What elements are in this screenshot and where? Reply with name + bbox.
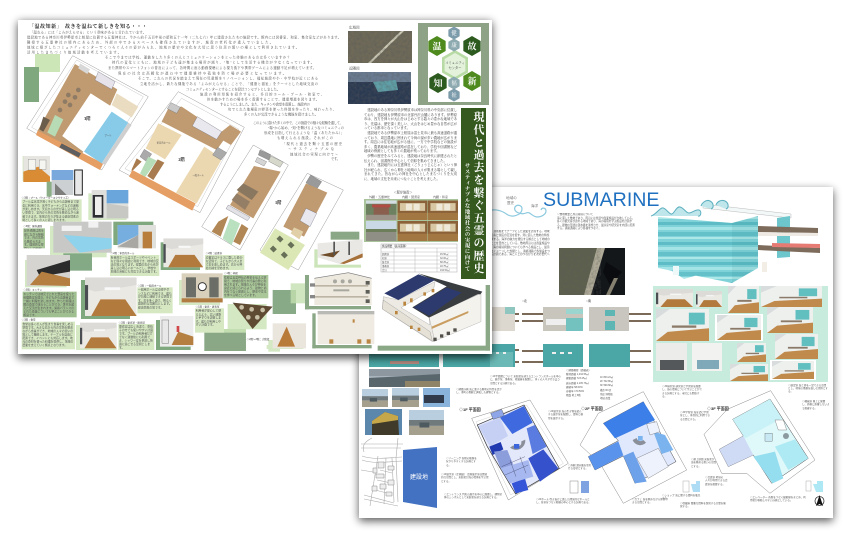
text blocks: plan notes: 3F 599.68㎡: [600, 384, 613, 387]
text block: introduction: するようにしました。また、キッチンや食堂を設置し、施設内の: [220, 102, 310, 106]
photos: existing facility: ＜既存施設＞: [393, 190, 413, 194]
heading: 温故知新: 「温故知新」 故きを温ねて新しきを知る・・・: [29, 23, 147, 30]
text blocks: plan notes: 地域 商業: [600, 397, 610, 400]
text blocks: plan notes: ◇機械室 屋上に配置し、外観に影響しないよう配慮する。: [802, 400, 829, 410]
text blocks: plan notes: ◇会議室 地域の人々が利用できる会議室を配置する。: [705, 476, 727, 486]
text: callout 6: [137, 284, 173, 313]
table: facility spec: 施設概要（延床面積）: [382, 244, 408, 248]
text blocks: plan notes: ◇ショップ 海に関する資料を販売する。: [662, 494, 700, 500]
text blocks: plan notes: ◇屋上庭園 来館者が海を眺める憩いの空間とする。: [691, 458, 716, 468]
hexagon: 知: 知: [433, 78, 443, 88]
text: callout 3: 多目的ホールはスポーツやイベントなど様々な用途に利用でき、地域の交流の場となります。壁面の窓から光が差し込む明るいホールとし、学校や地域の活動にも対応できる計画です。: [111, 256, 159, 273]
table: facility spec: [381, 244, 457, 272]
text block: site description: [364, 108, 457, 188]
text blocks: plan notes: ◇収蔵庫 貴重な資料を保管する空間を確保する。: [680, 502, 726, 508]
text: callout 8: 拝殿は五霊神社の歴史を伝える空間で、地域の祭りや行事の際に利用されます。地域の人々が神社を身近に感じられるよう、建物と境内をつなぐ配置とし、歴史や文化を学べる場としています。: [224, 276, 266, 296]
text blocks: plan notes: ◇建築計画 海に面する敷地の特性を活かし、港町の景観と調和した建物とする。: [456, 388, 502, 394]
render: open terrace: [314, 232, 363, 268]
text blocks: plan notes: 容積率 170.56%: [566, 390, 584, 393]
text: callout 3: [110, 251, 159, 276]
hexagons: 健康: 康: [451, 41, 457, 49]
decoration: blue wave with labels: 海洋: [531, 203, 539, 208]
render: upper-left wall (top): [47, 170, 82, 197]
text block: introduction: 隣接する五霊神社の境内にあるため、外部の中でさるスペースも確保されていますが、施設の老朽化が進んでいました。: [27, 40, 273, 44]
block: green decoration: [273, 283, 308, 314]
text: callout 5: 食堂は多くの人が集まり食事を楽しめる空間です。大きな窓から外の景色を眺めながら食事ができ、地域の人々の憩いの場として機能します。テーブルを自由に配置でき、イベントにも対応します。地元の食材を使った料理を提供し、地域の農業を支えていく拠点となります。: [22, 322, 73, 347]
text block: introduction: ～サスティナブルな: [288, 146, 334, 151]
text block: introduction: 形成を目指して行えるような「温（あたたかみ）」: [264, 130, 344, 135]
text blocks: plan notes: 用途 博物館: [600, 393, 613, 396]
decoration: green blocks: [24, 54, 60, 102]
floor plan: 2F: [119, 92, 244, 213]
labels: elevations: ○南: [586, 298, 591, 303]
render: tables from above: [233, 303, 273, 329]
poster: SUBMARINE (back sheet): [359, 187, 833, 521]
photo: 広域図: [348, 24, 412, 63]
map: site plan with 建設地: [361, 438, 437, 508]
hexagons: 福祉: 祉: [451, 91, 457, 99]
text: callout 10: [195, 305, 224, 333]
text blocks: plan notes: ◇外観 潜水艦を思わせる形状とする。: [568, 464, 591, 470]
text block: introduction: また携帯やスマートフォンの普及によって、各時間に座る動画視聴による視力低下や携帯ゲームによる運動不足が増えています。: [108, 65, 316, 70]
text blocks: plan notes: ◇2Fホール 吹き抜けに面した開放的なホールとし、各室をつなぐ動線の中心とする計画である。: [536, 498, 591, 504]
text block: concept notes: 海に面した敷地であり、周辺には漁港や商業施設が立地している。多くの観光客が訪れる地域であり、海の環境を学ぶ施設を計画する。建物の形状は潜水艦を連想させ、展示室や研究室を内部に配置する。連絡通路により各棟をつなぐ。: [557, 217, 635, 230]
hexagon: 故: 故: [467, 40, 477, 52]
text block: introduction: 地域に根ざしたコミュニティセンターでくつろぐ人々の姿がみられ、地域の歴史や文化を大切に思う住民の憩いの場として利用されています。: [27, 44, 299, 50]
text blocks: plan notes: [441, 369, 830, 510]
hexagon: 新: 新: [467, 76, 477, 86]
text block: introduction: 地域社会の実現に向けて～: [290, 152, 339, 156]
text block: introduction: "場"から始め、"知"を繋げるようなコミュニティの: [268, 125, 344, 130]
text: callout 1: プールは水深が浅く子どもから高齢者まで安全に利用でき、水中ウォーキングなどの運動が楽しめます。天窓からの光が差し込む明るい空間で、室内から外の景色を眺めながら運動できます。地域の方々が集まる健康増進の場として多くの人に親しまれます。: [22, 200, 79, 222]
text: callout 5: ◇3階：食堂: [22, 318, 36, 322]
text blocks: plan notes: ◇カフェ 海を眺めながら休憩できる空間とする。: [632, 498, 668, 504]
text block: site description: 伊勢の歴史をみてみると、建設地は奈良時代に創建されたと伝えられ、図書館を中心として信仰を集めてきました。: [364, 154, 457, 163]
hexagon: center: センター: [448, 65, 462, 70]
render: corner room with orange floor: [23, 156, 50, 182]
table: facility spec: 和室: [382, 256, 387, 260]
text: callout 9: 更衣室は広く清潔で、車椅子の方でも使いやすい計画です。プールの利用者だけでなく運動後にも利用でき、シャワー室を併設し快適に過ごせる空間とします。: [119, 325, 153, 349]
text: callout 4: キッチンでは地元でとれた野菜を使った料理教室を開き、子どもから高齢者まで一緒に料理を楽しめます。作った料理は隣の食堂で味わうことができ、世代を超えた交流が生まれます。栄養バランスのとれた食事についても学ぶことができる施設です。: [23, 292, 74, 317]
photo: 近隣図: 近隣図: [349, 66, 360, 70]
text: callout 2: ◇3階：屋外通路: [23, 224, 43, 228]
table: facility spec: 集会室: [382, 260, 390, 264]
3D model: building with solar roof: [378, 273, 490, 351]
text: callout 7: ◇2階：読書室: [206, 251, 222, 255]
text: callout 7: 読書室はテラスに面した静かな空間で、子どもから大人まで本を楽しめます。窓から神社の緑を望めます。: [206, 256, 242, 269]
photos: existing facility: [364, 190, 458, 242]
floor plan: 3F: 3階: [84, 115, 91, 122]
renders and elevations: lower middle: [267, 232, 374, 349]
hexagon: 温: 温: [432, 40, 442, 52]
text blocks: plan notes: ◇2F展示室 海の生き物を紹介する展示室を配置し、資料と模型を展示する。: [548, 410, 583, 420]
photos: existing facility: 内観：図書室: [402, 194, 420, 199]
table: facility spec: 164.50㎡: [440, 268, 450, 272]
decoration: blue wave with labels: 地域の: [506, 195, 517, 200]
text block: introduction: 活用したまちづくり地域活動を考えています。: [27, 50, 121, 54]
heading: 2F plan: ◇2F 平面図: [581, 406, 603, 411]
text: label 大階段: ◇2階〜3階：大階段: [247, 337, 270, 341]
text: callout 9: ◇2階：更衣室・脱衣場: [119, 320, 145, 324]
text: callout 7: [205, 251, 244, 270]
text blocks: plan notes: 1F 803.24㎡: [600, 376, 613, 379]
render: corridor with sky: [92, 190, 128, 218]
table: facility spec: 合計: [382, 268, 387, 272]
heading: 3F plan: ◇3F 平面図: [707, 406, 729, 411]
text block: introduction: 旬でとれた地場産の野菜を使った料理を作ったり、味わったり、: [228, 106, 336, 112]
photos: existing facility: 内観：和室: [433, 194, 448, 199]
render: multipurpose hall: [85, 277, 137, 316]
text: callout 1: ◇3階：プール（ウォーターエクササイズ）: [22, 195, 70, 199]
text blocks: plan notes: ◇3F研究室 研究室と学習室を配置し、海の環境について学ぶことができる計画とする。市民にも開放する。: [662, 385, 702, 398]
text blocks: plan notes: 敷地面積 1,234.56㎡: [566, 373, 589, 376]
hexagons: 健康: 健: [451, 29, 457, 37]
text: callout 6: 一般用ホールは卓球やダンスなどに利用でき、誰もが気軽に運動できる空間です。窓を多く設け、明るく開放的な雰囲気とします。健康増進の場です。: [138, 288, 172, 309]
text blocks: plan notes: ◇エントランス 円形の展示を中心に配置し、建物全体のシンボルとして来館者を迎える計画とする。: [444, 493, 502, 499]
text block: left column: 海と人とのつながりを次の世代へ伝えるため、潜水艦をモチーフにした建築を計画する。地域の歴史や海洋資源について学ぶ場を設け、観光客と住民の交流を促す。港に面した敷地の特性を活かし、海を望む展示空間と研究施設を配置する。海洋の魅力を発信する拠点として地域の活性化を図り、港町の新しい風景を生み出すことを目的としている。敷地周辺には商業施設や漁港があり、多くの人々が訪れる地域である。海の環境問題についても学べる施設とし、展示や体験を通じて理解を深める。建物全体は波をイメージした外観とし、連絡通路で各施設をつなぐ。地域住民の憩いの場としても利用できる計画である。海と人とのつながりを次の世代へ伝える。: [437, 230, 550, 260]
text blocks: plan notes: ◇エレベーター 各階をつなぐ縦動線をまとめ、利用者が移動しやすい計画としている。: [750, 496, 806, 502]
text blocks: plan notes: 構造 RC造: [600, 389, 611, 392]
text blocks: plan notes: 2F 702.86㎡: [600, 380, 613, 383]
decoration: blue wave with labels: 歴史: [507, 200, 515, 205]
decoration: blue wave with labels: [492, 195, 546, 217]
table: facility spec: 68.25㎡: [440, 260, 449, 264]
floor plan: 2F: 多目的ホール: [157, 140, 171, 144]
text block: introduction: 立地を活かし、新たな機能である「よみがえらせる」ことで、「健康と福祉」をテーマとした地域交流の: [140, 81, 318, 86]
floor plan: 1F east wing: [260, 173, 343, 270]
text block: site description: 建設地のある神奈川県伊勢原市は神奈川県の中央部に位置しており、建設地も伊勢原市の北部丹沢山麓にあります。伊勢原市は、四方を神々が大山をはじめとする数々の豊かな地域であり、先端は、歴史深く美しい、大山をはじめ豊かな自然が広がっている都市となっています。: [364, 108, 457, 130]
text block: introduction: コミュニティセンターとすることを設計コンセプトとしました。: [186, 86, 280, 92]
floor plan: 3F: [27, 56, 148, 170]
text blocks: plan notes: 延床面積 2,105.78㎡: [566, 382, 589, 385]
text: callout 10: 利用者が安心して使えるよう、広い通路と手すりを設置します。誰もが利用しやすい計画です。: [196, 309, 221, 326]
render: dining: [80, 323, 117, 348]
text block: site description: また、建設地内には五霊神社（ごりょうじんじゃ）という神社が祀られ、広くから神社と地域の人々が集まる場として親しまれてきた。昔ながらの神社を中心としたまちづくりを大切に、地域の文化を未来につなぐことを考えました。: [364, 163, 457, 181]
hexagon: center: [442, 50, 468, 80]
heading: 1F plan: ◇1F 平面図: [459, 407, 481, 412]
hexagons: 福祉: 福: [451, 79, 457, 87]
photos: site: [362, 369, 450, 435]
floor plan: 2F: [580, 392, 687, 503]
render: door and stairs: [118, 225, 156, 248]
text block: introduction: 時代の変化とともに、地域の子ども達が集まる場所が減り、"集"として生活する機会が少なくなっています。: [112, 60, 314, 64]
text blocks: plan notes: ◇展望室 海と港を一望できる空間とし、地域の景観を楽しむ場所とする。: [788, 384, 828, 393]
text block: concept notes: ◇敷地概要と周辺環境について: [557, 213, 593, 216]
render: entrance: [160, 316, 193, 347]
hexagon: center: コミュニティ: [445, 60, 465, 65]
text block: concept notes: [557, 213, 635, 243]
text block: introduction: も増えられる施設。それがこの: [277, 135, 333, 140]
photo: aerial view: [559, 248, 625, 295]
text block: introduction: 「温ねる」には「よみがえらせる」という意味があると言われています。: [30, 30, 146, 34]
labels: elevations: [522, 298, 591, 303]
render: stair: [267, 323, 306, 349]
text block: introduction: です。: [331, 157, 340, 161]
callouts and interior renders: left side: [22, 156, 280, 352]
hexagons: 健康: [448, 26, 460, 52]
elevation: north: [305, 273, 372, 309]
render: shrine wall: [182, 273, 223, 303]
table: facility spec: 図書室: [382, 252, 390, 256]
text block: introduction: このように設けた多くの中で、この施設での様々な経験を通して、: [253, 120, 343, 125]
floor plan: 1F: [472, 400, 568, 500]
text blocks: plan notes: ◇ゾーニング 各階の動線を分かりやすくする計画とする。: [446, 457, 477, 467]
text block: introduction: 建設地である神奈川県伊勢原市上粕屋に位置する五霊神社は、今から約千五百年前の昭和五十一年（二九七六）年に建設された木の施設です。館内には図書室、和室、集会室などがあります。: [27, 34, 341, 40]
text blocks: plan notes: 階数 地上3階: [566, 394, 581, 397]
panel: mint interior renders: [653, 286, 828, 382]
labels: elevations: ○北: [522, 298, 528, 303]
floor plan: 2F: 2階: [178, 156, 185, 163]
table: facility spec: 45.50㎡: [440, 252, 449, 256]
subtitle: サスティナブルな地域社会の実現に向けて: [464, 163, 470, 271]
text: callout 3: ◇2階：多目的ホール: [111, 251, 135, 255]
floor plan: 2F: 一般ホール: [192, 173, 205, 177]
photos: existing facility: 外観：五霊神社: [369, 194, 390, 199]
text: callout 4: ◇3階：キッチン: [23, 288, 43, 292]
text block: introduction: そこで、これらの状況を踏まえて現在の児童館をリノベーションし、福祉施設や小・中学校が近くにある: [138, 76, 318, 80]
text blocks: plan notes: 建築面積 723.45㎡: [566, 377, 587, 380]
text block: introduction: [27, 30, 344, 161]
floor plan: 3F: [704, 391, 815, 493]
text block: introduction: 現在の社会は高齢化が進む中で健康維持や孤独を防ぐ場が必要となっています。: [118, 70, 286, 76]
3D model: teal striped building: [651, 200, 820, 283]
text block: introduction: 多くの人が交流できるような機能を設けました。: [244, 112, 318, 116]
text block: introduction: 体を動かすための場を多く設置することで、健康増進を図ります。: [207, 96, 319, 102]
panel: concept diagram: [418, 23, 489, 105]
elevations: west and east: [369, 307, 651, 367]
text blocks: plan notes: ◇1F展示室（企画展） 企画展示室は開放的な空間とし、来館者が海の環境を学ぶ場とする。: [441, 473, 489, 483]
table: facility spec: 32.00㎡: [440, 256, 449, 260]
text block: site description: 建設地である伊勢原市上粕屋は富士見市に最も高速道路が通っており、周辺農地に囲まれて今尚の緑が多い農地が広がります。周辺には住宅地が広がる他に、一方で中学校などの施設が多く、農業地域が高速道路が混在しており、学校や図書館など地域の資源としても多くの農地が残っております。: [364, 131, 457, 153]
title: SUBMARINE: SUBMARINE: [543, 189, 660, 211]
text: callout 8: ◇1階：拝殿: [224, 271, 238, 275]
render: pool: [53, 222, 112, 253]
text blocks: plan notes: 建蔽率 58.60%: [566, 386, 583, 389]
render: reading hall: [163, 238, 203, 267]
floor plan: 3F: プール: [104, 133, 112, 137]
text block: introduction: 施設の利用形態を紹介すると、多目的ホール・プール・和室で、: [200, 92, 324, 96]
map: site plan with 建設地: 建設地: [410, 473, 428, 481]
photo: 近隣図: [348, 66, 411, 104]
table: facility spec: 18.75㎡: [440, 264, 449, 268]
elevation: south: [312, 311, 374, 348]
poster: 温故知新 (front sheet): [18, 20, 492, 358]
title panel: vertical title: [461, 108, 486, 279]
title: 現代と過去を繋ぐ五霊の歴史: 現代と過去を繋ぐ五霊の歴史: [472, 110, 484, 275]
text blocks: plan notes: ◇建築概要（面積表）: [566, 369, 591, 372]
floor plan: 1F west wing: [202, 145, 288, 250]
text block: introduction: 「現代と過去を繋ぐ五霊の歴史: [282, 141, 343, 146]
table: facility spec: 事務室: [382, 264, 390, 268]
icon: north arrow: [815, 495, 824, 506]
text: callout 6: ◇2階：一般用ホール: [138, 284, 162, 288]
photo: 広域図: 広域図: [349, 24, 360, 30]
text block: introduction: そこで今までは学校、運動をしたり多くの人とコミュニケーションをとった体験のある方は多くいますか？: [105, 54, 290, 60]
key plans: [570, 481, 823, 493]
hexagons: 福祉: [448, 76, 460, 102]
floor plan: 1F east wing: 1階: [275, 199, 282, 206]
text blocks: plan notes: ◇3F学習室 海を望む学習室とし、多目的に利用できる空間とする。: [680, 411, 710, 421]
text: callout 10: ◇1階：更衣・更衣室: [196, 305, 220, 309]
render: kitchen corridor: [27, 255, 70, 286]
text blocks: plan notes: ◇1F平面図について 来館者を迎えるエントランスホールを中心に、展示室、事務室、収蔵庫を配置し、多くの人々が行き交う空間とする計画である。: [490, 375, 561, 385]
